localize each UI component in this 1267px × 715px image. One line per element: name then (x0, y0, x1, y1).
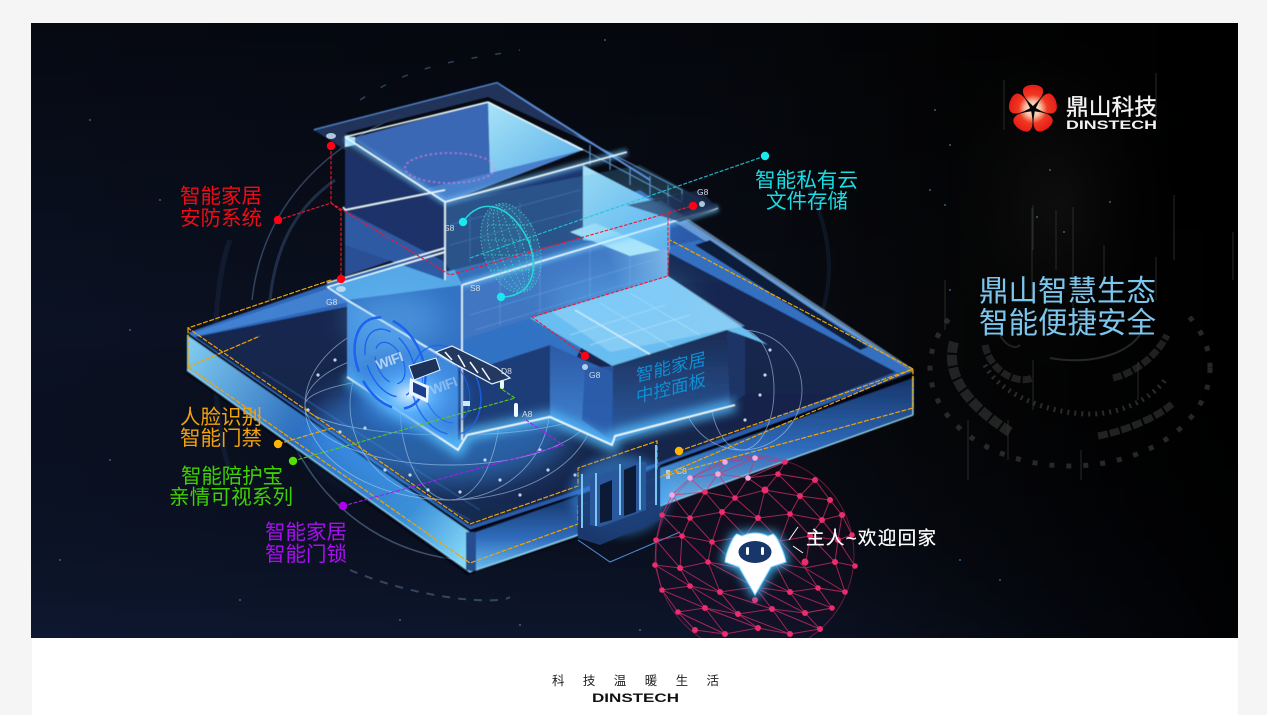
base walls (186, 334, 913, 574)
ground glow (310, 375, 570, 485)
headline: 智能便捷安全 (979, 307, 1156, 340)
blue wifi glow (346, 349, 475, 441)
device codes: G8 (589, 370, 601, 380)
building (314, 83, 768, 450)
entrance door (570, 445, 680, 562)
railing (565, 130, 682, 205)
label: smart lock (265, 521, 347, 566)
logo: DINSTECH (1066, 120, 1157, 132)
label: security (180, 185, 262, 230)
second floor wall (463, 244, 670, 339)
panel label text (636, 351, 706, 402)
label: face recognition: 智能门禁 (180, 427, 262, 450)
floor slab lines (462, 208, 718, 285)
building light wash (347, 198, 690, 348)
device codes: S8 (470, 283, 481, 293)
security link lines (278, 146, 692, 356)
globe mesh (305, 310, 802, 500)
hud rings around house (215, 50, 829, 600)
label: face recognition (180, 406, 262, 450)
icon: router devices (409, 346, 518, 417)
label: companion (169, 465, 293, 509)
headline: 鼎山智慧生态 (979, 275, 1156, 308)
label: private cloud: 文件存储 (766, 190, 848, 213)
camera icons (326, 133, 705, 479)
label: security: 智能家居 (180, 185, 262, 208)
terrace floor right (530, 276, 768, 366)
roof slab (314, 83, 650, 180)
panel label text: 中控面板 (636, 370, 706, 407)
device codes: G8 (697, 187, 709, 197)
mesh nodes (306, 348, 772, 497)
pink network sphere (652, 455, 858, 655)
logo flower (1007, 85, 1059, 135)
robot location pin (725, 533, 786, 595)
upper magenta dome (405, 153, 495, 183)
footer slogan: 科技温暖生活 (552, 674, 719, 688)
wifi labels (374, 352, 458, 394)
logo (1007, 85, 1157, 135)
headline (979, 275, 1156, 340)
ground floor block (347, 280, 585, 450)
upper level right (445, 165, 583, 272)
hud rings right (928, 316, 1212, 468)
logo wordmark: 鼎山科技 (1066, 94, 1157, 120)
orange boundary lines (188, 240, 913, 563)
cloud storage link (459, 152, 769, 301)
central control panel block (613, 330, 730, 442)
cloud data sphere (480, 202, 542, 294)
base floor (187, 190, 913, 530)
label: face recognition: 人脸识别 (180, 406, 262, 429)
panel floor edge (347, 377, 735, 450)
device codes: C8 (676, 466, 687, 476)
label: smart lock: 智能门锁 (265, 543, 347, 566)
label: security: 安防系统 (180, 207, 262, 230)
footer slogan: DINSTECH (592, 693, 679, 705)
panel label text: 智能家居 (636, 349, 706, 386)
label: private cloud: 智能私有云 (755, 169, 858, 192)
purple link (339, 420, 563, 510)
device codes: D8 (501, 366, 512, 376)
label: smart lock: 智能家居 (265, 521, 347, 544)
greeting: 主人~欢迎回家 (806, 528, 936, 548)
orange dots (274, 440, 683, 455)
footer slogan (552, 674, 719, 705)
green link (289, 388, 515, 465)
device codes: S8 (444, 223, 455, 233)
label: private cloud (755, 169, 858, 213)
top box (345, 148, 445, 262)
device codes: G8 (326, 297, 338, 307)
wifi labels: WIFI (428, 373, 459, 398)
wifi labels: WIFI (374, 348, 405, 373)
label: companion: 亲情可视系列 (169, 486, 293, 509)
terrace slab outline right (627, 190, 718, 222)
device codes: A8 (522, 409, 533, 419)
device codes (326, 187, 709, 476)
label: companion: 智能陪护宝 (181, 465, 283, 488)
icon: wifi signals (353, 316, 482, 435)
red dots (274, 142, 697, 360)
